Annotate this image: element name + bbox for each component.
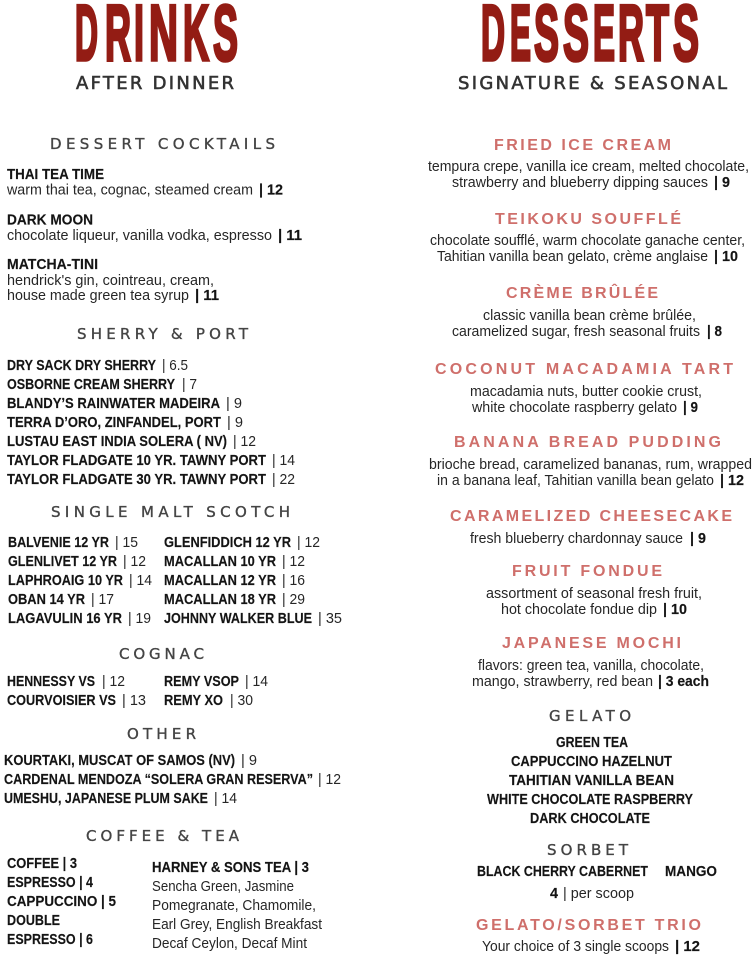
section: cognac: [7, 645, 268, 709]
list: sherry and port items: TERRA D’ORO, ZINFANDEL, PORT: [7, 415, 221, 431]
list: scotch right column: MACALLAN 12 YR: [164, 573, 276, 589]
section: dessert cocktails: [6, 135, 302, 304]
list: cognac items: [7, 674, 268, 709]
list: scotch right column: | 29: [282, 592, 305, 608]
item: creme brulee: classic vanilla bean crème brûlée,: [483, 308, 696, 324]
list: cognac items: | 12: [102, 674, 125, 690]
price: per scoop: | per scoop: [563, 886, 634, 902]
list: scotch right column: | 12: [282, 554, 305, 570]
heading: gelato: GELATO: [549, 707, 631, 725]
list: harney and sons tea: Decaf Ceylon, Decaf Mint: [152, 936, 307, 952]
list: other items: [4, 753, 341, 807]
item: teikoku souffle: [430, 209, 745, 265]
list: sherry and port items: LUSTAU EAST INDIA SOLERA ( NV): [7, 434, 227, 450]
list: scotch left column: | 17: [91, 592, 114, 608]
item: banana bread pudding: | 12: [720, 473, 744, 489]
list: scotch left column: GLENLIVET 12 YR: [8, 554, 117, 570]
list: sherry and port items: | 22: [272, 472, 295, 488]
item: fried ice cream: strawberry and blueberry dipping sauces: [452, 175, 708, 191]
item: dark moon: DARK MOON: [7, 212, 93, 228]
item: fruit fondue: assortment of seasonal fresh fruit,: [486, 586, 702, 602]
item: gelato sorbet trio: GELATO/SORBET TRIO: [476, 917, 701, 934]
list: other items: | 14: [214, 791, 237, 807]
item: thai tea time: THAI TEA TIME: [7, 167, 104, 183]
heading: coffee and tea: COFFEE & TEA: [86, 827, 240, 845]
list: sherry and port items: | 14: [272, 453, 295, 469]
heading: cognac: COGNAC: [119, 645, 204, 663]
item: matcha-tini: | 11: [195, 288, 219, 304]
list: sherry and port items: | 7: [182, 377, 197, 393]
item: teikoku souffle: TEIKOKU SOUFFLÉ: [495, 209, 681, 228]
item: fried ice cream: tempura crepe, vanilla ice cream, melted chocolate,: [428, 159, 749, 175]
list: sorbet flavors: BLACK CHERRY CABERNET: [477, 864, 648, 880]
list: harney and sons tea: Pomegranate, Chamomile,: [152, 898, 316, 914]
list: gelato flavors: TAHITIAN VANILLA BEAN: [509, 773, 674, 789]
item: thai tea time: warm thai tea, cognac, steamed cream: [6, 182, 253, 198]
item: caramelized cheesecake: | 9: [690, 531, 706, 547]
list: cognac items: | 30: [230, 693, 253, 709]
section: sherry and port: [7, 325, 295, 488]
list: scotch left column: OBAN 14 YR: [8, 592, 85, 608]
list: coffee items: COFFEE | 3: [7, 856, 77, 872]
list: sherry and port items: | 9: [227, 415, 243, 431]
item: banana bread pudding: [429, 434, 752, 489]
list: cognac items: COURVOISIER VS: [7, 693, 116, 709]
list: scotch left column: LAGAVULIN 16 YR: [8, 611, 122, 627]
title: drinks: [75, 0, 238, 77]
item: dark moon: chocolate liqueur, vanilla vodka, espresso: [7, 228, 272, 244]
item: coconut macadamia tart: macadamia nuts, butter cookie crust,: [470, 384, 702, 400]
item: japanese mochi: JAPANESE MOCHI: [502, 635, 681, 652]
list: harney and sons tea: HARNEY & SONS TEA | 3: [152, 860, 309, 876]
item: creme brulee: CRÈME BRÛLÉE: [506, 283, 658, 302]
list: sherry and port items: BLANDY’S RAINWATER MADEIRA: [7, 396, 220, 412]
item: fruit fondue: hot chocolate fondue dip: [501, 602, 657, 618]
item: banana bread pudding: BANANA BREAD PUDDING: [454, 434, 721, 451]
list: scotch right column: | 12: [297, 535, 320, 551]
list: sorbet flavors: MANGO: [665, 864, 717, 880]
item: teikoku souffle: Tahitian vanilla bean gelato, crème anglaise: [437, 249, 708, 265]
list: coffee items: ESPRESSO | 6: [7, 932, 93, 948]
item: caramelized cheesecake: fresh blueberry chardonnay sauce: [470, 531, 683, 547]
item: fruit fondue: | 10: [663, 602, 687, 618]
item: gelato sorbet trio: [476, 917, 701, 955]
item: dark moon: | 11: [278, 228, 302, 244]
list: scotch left column: | 19: [128, 611, 151, 627]
list: sherry and port items: | 9: [226, 396, 242, 412]
list: other items: | 9: [241, 753, 257, 769]
item: japanese mochi: | 3 each: [658, 674, 709, 690]
list: sherry and port items: DRY SACK DRY SHERRY: [7, 358, 156, 374]
list: scotch right column: GLENFIDDICH 12 YR: [164, 535, 291, 551]
heading: sorbet: SORBET: [547, 841, 629, 859]
list: other items: KOURTAKI, MUSCAT OF SAMOS (NV): [4, 753, 235, 769]
item: japanese mochi: [472, 635, 709, 690]
item: teikoku souffle: | 10: [714, 249, 738, 265]
list: other items: UMESHU, JAPANESE PLUM SAKE: [4, 791, 208, 807]
list: gelato flavors: DARK CHOCOLATE: [530, 811, 650, 827]
list: sherry and port items: | 6.5: [162, 358, 188, 374]
item: banana bread pudding: brioche bread, caramelized bananas, rum, wrapped: [429, 457, 752, 473]
title: desserts: [481, 0, 699, 77]
list: sherry and port items: TAYLOR FLADGATE 30 YR. TAWNY PORT: [7, 472, 266, 488]
list: gelato flavors: WHITE CHOCOLATE RASPBERRY: [487, 792, 693, 808]
price: per scoop: 4: [550, 886, 558, 902]
list: gelato flavors: GREEN TEA: [556, 735, 628, 751]
list: coffee items: DOUBLE: [7, 913, 60, 929]
list: cognac items: | 13: [122, 693, 146, 709]
list: coffee items: ESPRESSO | 4: [7, 875, 93, 891]
item: fried ice cream: | 9: [714, 175, 730, 191]
item: thai tea time: [6, 167, 283, 198]
list: scotch right column: | 16: [282, 573, 305, 589]
list: harney and sons tea: Sencha Green, Jasmine: [152, 879, 294, 895]
heading: dessert cocktails: DESSERT COCKTAILS: [50, 135, 275, 153]
list: scotch left column: | 12: [123, 554, 146, 570]
item: gelato sorbet trio: | 12: [675, 939, 700, 955]
item: banana bread pudding: in a banana leaf, Tahitian vanilla bean gelato: [437, 473, 714, 489]
item: matcha-tini: [7, 257, 219, 304]
list: scotch left column: | 15: [115, 535, 138, 551]
panel: desserts column: [428, 0, 752, 955]
item: matcha-tini: MATCHA-TINI: [7, 257, 98, 273]
list: harney and sons tea: Earl Grey, English Breakfast: [152, 917, 322, 933]
list: cognac items: HENNESSY VS: [7, 674, 95, 690]
item: coconut macadamia tart: | 9: [683, 400, 698, 416]
item: japanese mochi: mango, strawberry, red bean: [472, 674, 653, 690]
item: caramelized cheesecake: CARAMELIZED CHEESECAKE: [450, 508, 732, 525]
list: scotch right column: | 35: [318, 611, 342, 627]
panel: drinks column: [4, 0, 342, 952]
item: creme brulee: caramelized sugar, fresh seasonal fruits: [452, 324, 700, 340]
item: thai tea time: | 12: [259, 182, 283, 198]
section: coffee and tea: [7, 827, 322, 952]
list: gelato flavors: [487, 735, 693, 827]
list: sherry and port items: [7, 358, 295, 488]
list: coffee items: CAPPUCCINO | 5: [7, 894, 116, 910]
item: coconut macadamia tart: [435, 361, 733, 416]
list: scotch right column: MACALLAN 18 YR: [164, 592, 276, 608]
item: matcha-tini: house made green tea syrup: [7, 288, 189, 304]
list: other items: CARDENAL MENDOZA “SOLERA GRAN RESERVA”: [4, 772, 313, 788]
list: harney and sons tea: [152, 860, 322, 952]
item: fried ice cream: [428, 137, 749, 191]
list: scotch left column: LAPHROAIG 10 YR: [8, 573, 123, 589]
list: sherry and port items: | 12: [233, 434, 256, 450]
item: teikoku souffle: chocolate soufflé, warm chocolate ganache center,: [430, 233, 745, 249]
list: coffee items: [7, 856, 116, 948]
item: coconut macadamia tart: white chocolate raspberry gelato: [471, 400, 677, 416]
list: scotch right column: [164, 535, 342, 627]
list: sherry and port items: TAYLOR FLADGATE 10 YR. TAWNY PORT: [7, 453, 266, 469]
list: scotch left column: BALVENIE 12 YR: [8, 535, 109, 551]
item: fried ice cream: FRIED ICE CREAM: [494, 137, 671, 154]
list: cognac items: | 14: [245, 674, 268, 690]
section: gelato: [487, 707, 693, 827]
heading: single malt scotch: SINGLE MALT SCOTCH: [51, 503, 290, 521]
subtitle: signature and seasonal: SIGNATURE & SEASONAL: [458, 73, 727, 94]
list: other items: | 12: [318, 772, 341, 788]
list: cognac items: REMY VSOP: [164, 674, 239, 690]
section: other: [4, 725, 341, 807]
item: creme brulee: | 8: [707, 324, 722, 340]
list: scotch left column: | 14: [129, 573, 152, 589]
list: scotch left column: [8, 535, 152, 627]
item: fruit fondue: FRUIT FONDUE: [512, 563, 662, 580]
section: sorbet: [477, 841, 717, 902]
item: japanese mochi: flavors: green tea, vanilla, chocolate,: [478, 658, 704, 674]
item: matcha-tini: hendrick's gin, cointreau, cream,: [7, 273, 214, 289]
heading: sherry and port: SHERRY & PORT: [77, 325, 249, 343]
item: dark moon: [7, 212, 302, 244]
subtitle: after dinner: AFTER DINNER: [76, 73, 234, 94]
list: cognac items: REMY XO: [164, 693, 223, 709]
list: sherry and port items: OSBORNE CREAM SHERRY: [7, 377, 175, 393]
item: gelato sorbet trio: Your choice of 3 single scoops: [482, 939, 669, 955]
item: coconut macadamia tart: COCONUT MACADAMIA TART: [435, 361, 733, 378]
item: creme brulee: [452, 283, 722, 340]
item: caramelized cheesecake: [450, 508, 732, 547]
list: gelato flavors: CAPPUCCINO HAZELNUT: [511, 754, 672, 770]
list: scotch right column: JOHNNY WALKER BLUE: [164, 611, 312, 627]
item: fruit fondue: [486, 563, 702, 618]
list: scotch right column: MACALLAN 10 YR: [164, 554, 276, 570]
heading: other: OTHER: [127, 725, 196, 743]
section: single malt scotch: [8, 503, 342, 627]
